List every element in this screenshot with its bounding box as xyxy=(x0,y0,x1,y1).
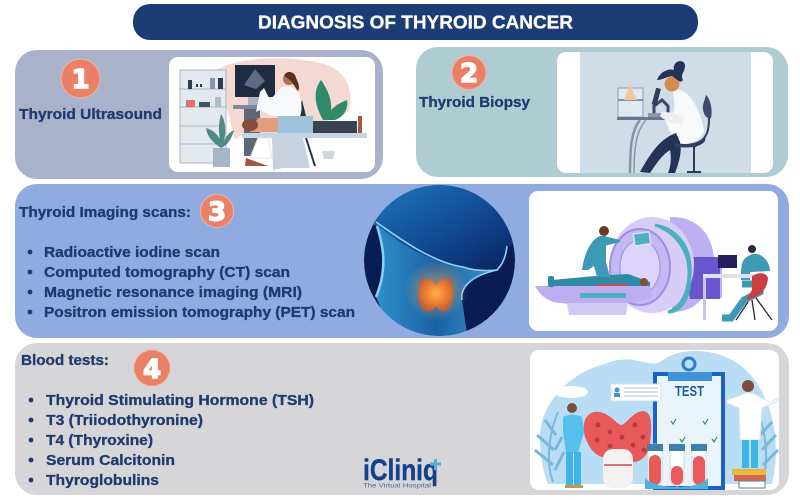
illustration: scientist at microscope xyxy=(557,52,773,173)
heading: Thyroid Ultrasound: Thyroid Ultrasound xyxy=(19,106,162,123)
list: imaging scans: Computed tomography (CT) scan xyxy=(44,265,290,281)
number badge 2 xyxy=(452,56,486,90)
illustration: thyroid test xyxy=(530,350,779,490)
list: blood tests: Thyroglobulins xyxy=(46,473,159,489)
list: blood tests: Serum Calcitonin xyxy=(46,453,175,469)
title banner xyxy=(133,4,698,40)
panel: thyroid biopsy xyxy=(416,47,788,177)
list: blood tests: T4 (Thyroxine) xyxy=(46,433,153,449)
logo: iCliniq: The Virtual Hospital xyxy=(363,482,432,490)
heading: Blood tests: Blood tests: xyxy=(21,352,109,369)
illustration: thyroid test: TEST xyxy=(675,383,704,400)
logo: iCliniq: iCliniq xyxy=(363,454,438,487)
illustration: MRI scanner xyxy=(529,191,778,331)
panel: thyroid ultrasound xyxy=(15,50,383,179)
heading: Thyroid Imaging scans: Thyroid Imaging scans: xyxy=(19,204,191,221)
list: blood tests xyxy=(29,393,314,489)
number badge 1 xyxy=(61,59,100,98)
list: blood tests: T3 (Triiodothyronine) xyxy=(46,413,203,429)
number badge 3 xyxy=(200,194,234,228)
list: imaging scans xyxy=(28,245,355,321)
title banner: DIAGNOSIS OF THYROID CANCER xyxy=(258,12,573,32)
illustration: ultrasound exam xyxy=(169,57,375,172)
number badge 4 xyxy=(134,350,170,386)
list: imaging scans: Radioactive iodine scan xyxy=(44,245,220,261)
number badge 3: 3 xyxy=(208,198,226,228)
illustration: glowing thyroid in neck xyxy=(364,185,515,336)
list: imaging scans: Magnetic resonance imaging (MRI) xyxy=(44,285,302,301)
number badge 4: 4 xyxy=(143,355,161,385)
list: imaging scans: Positron emission tomography (PET) scan xyxy=(44,305,355,321)
number badge 1: 1 xyxy=(71,65,90,95)
panel: thyroid imaging scans xyxy=(15,180,789,340)
list: blood tests: Thyroid Stimulating Hormone (TSH) xyxy=(46,393,314,409)
panel: blood tests xyxy=(15,343,789,495)
number badge 2: 2 xyxy=(460,59,478,89)
heading: Thyroid Biopsy: Thyroid Biopsy xyxy=(419,94,531,111)
